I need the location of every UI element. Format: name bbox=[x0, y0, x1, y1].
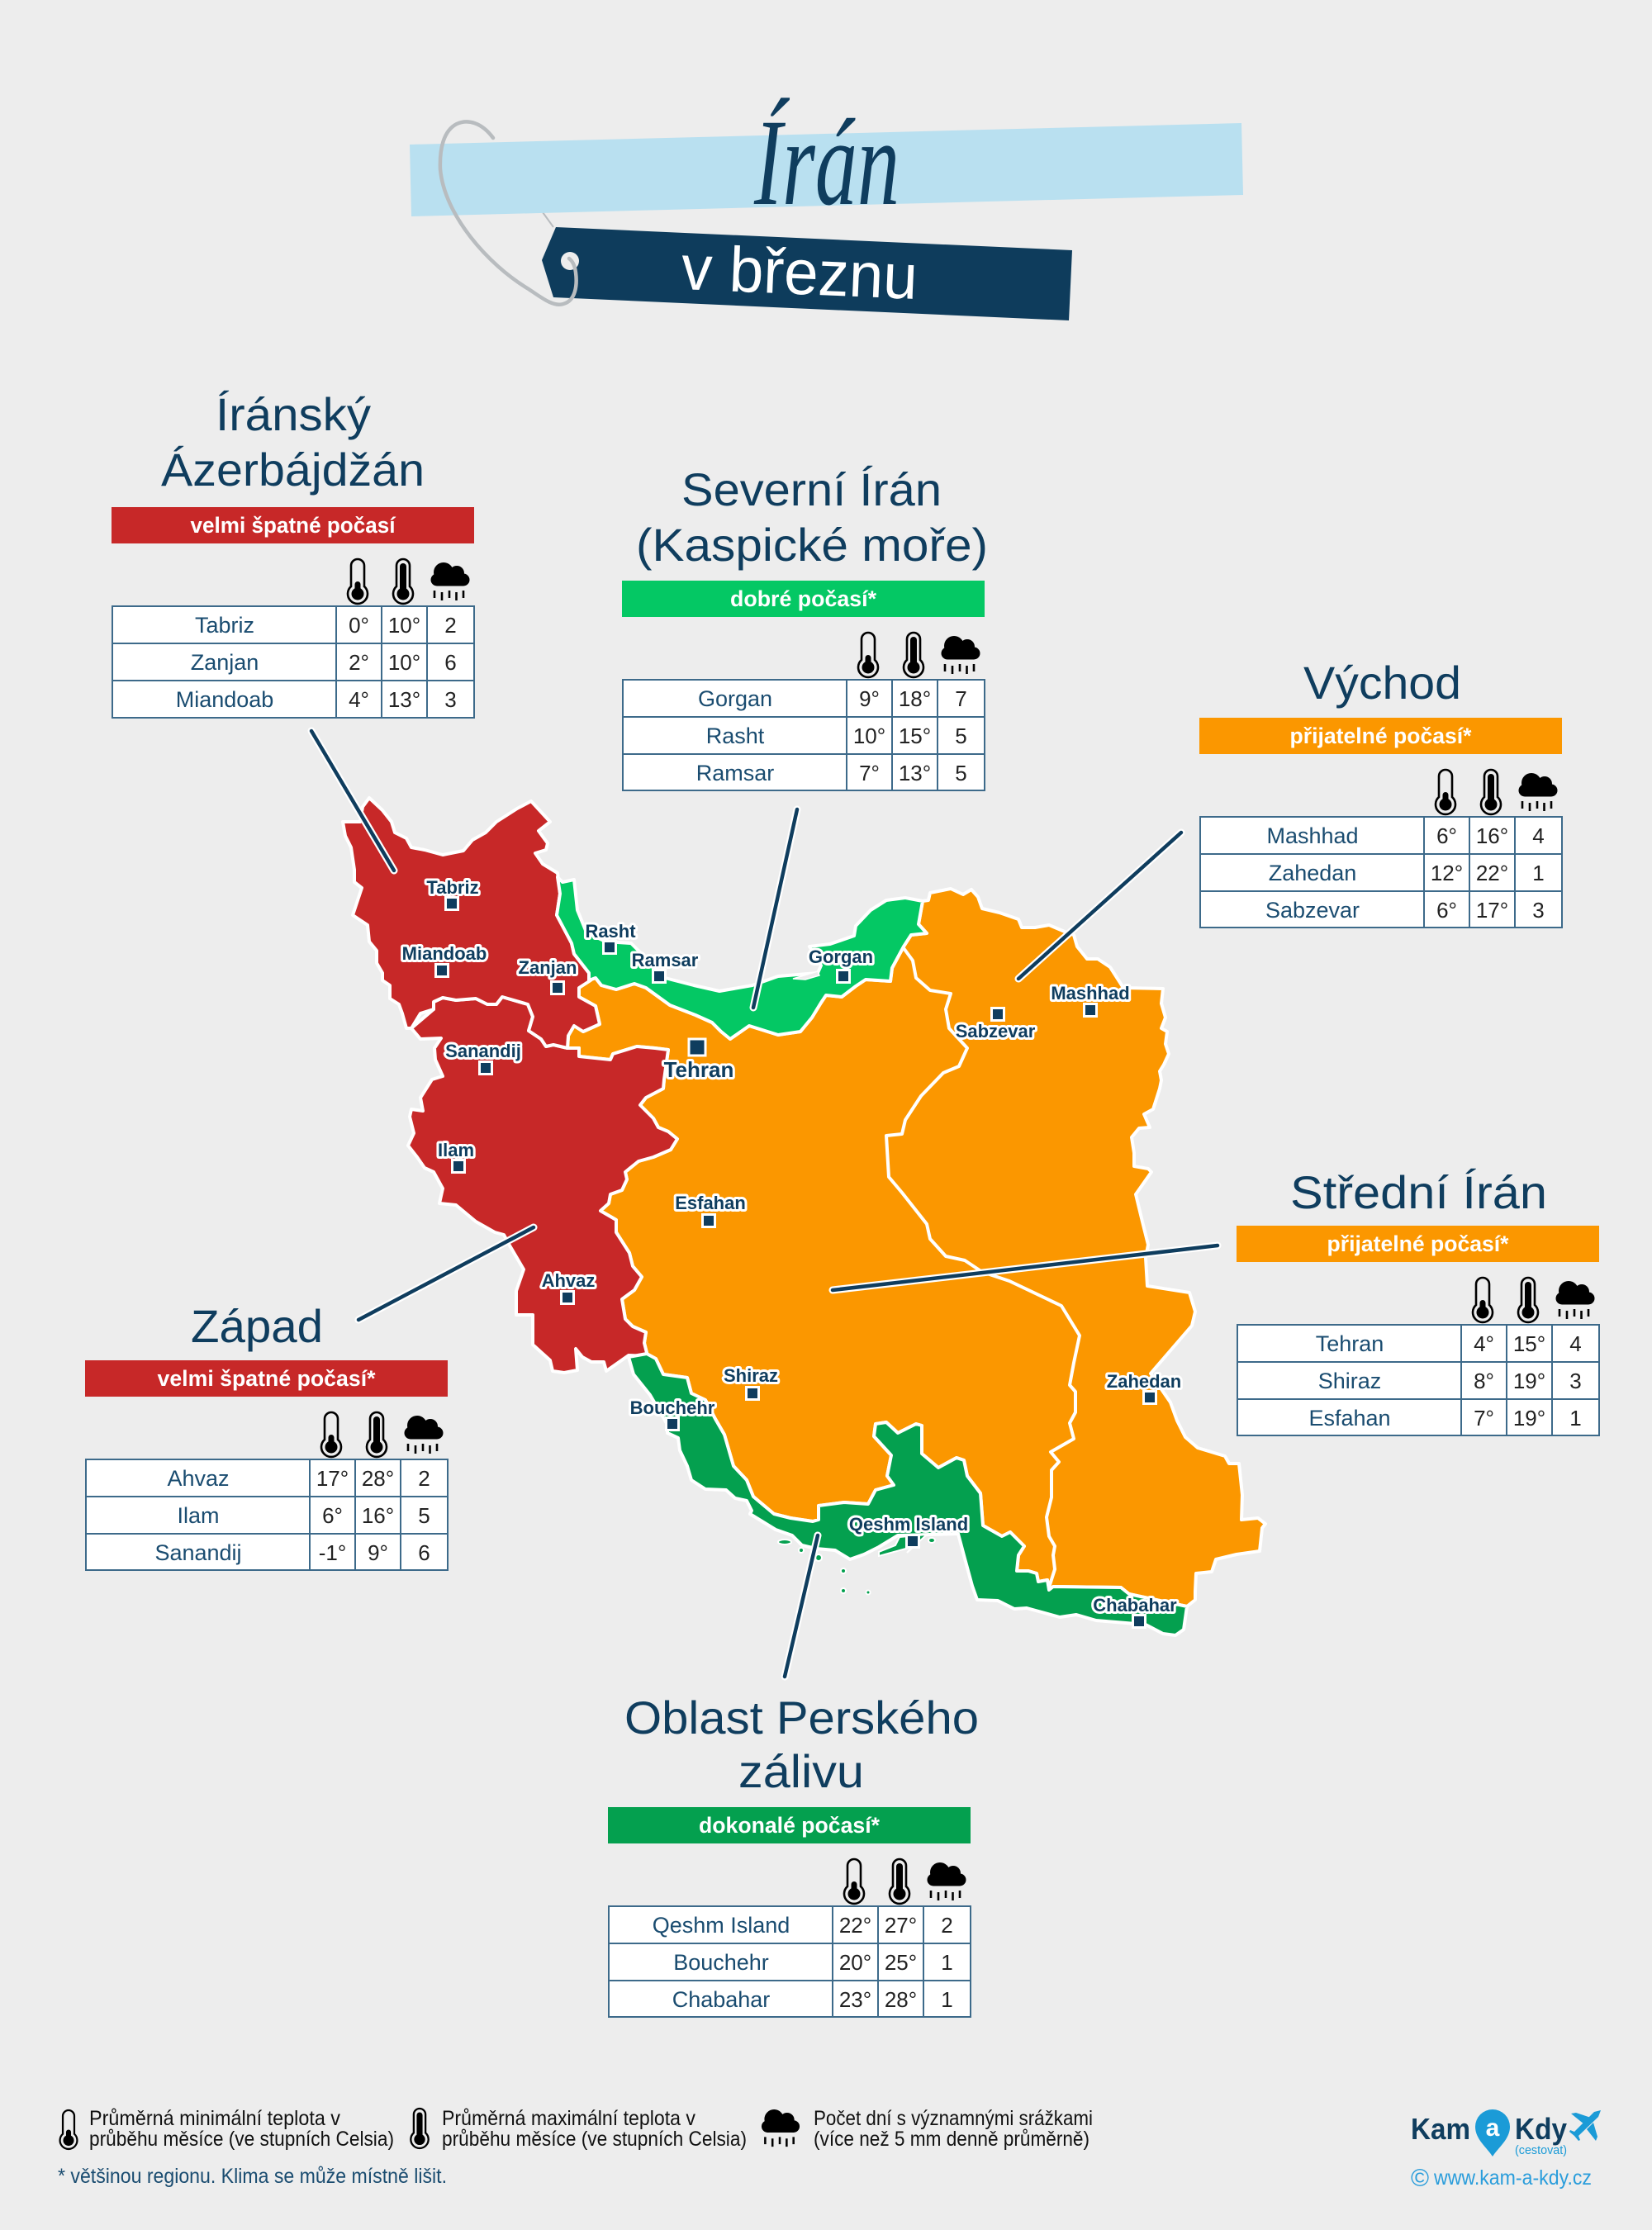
city: Tehran bbox=[664, 1039, 733, 1082]
weather table: Qeshm Island bbox=[653, 1913, 790, 1938]
weather table: 1 bbox=[941, 1950, 953, 1975]
weather table: 10° bbox=[388, 650, 420, 675]
weather table: Ilam bbox=[177, 1503, 220, 1528]
city: Qeshm Island bbox=[849, 1514, 968, 1548]
legend: maximum temperature bbox=[411, 2107, 747, 2151]
panel: east bbox=[1199, 657, 1562, 928]
city: Gorgan: Gorgan bbox=[809, 947, 873, 967]
tag ring bbox=[440, 121, 577, 305]
line: east bbox=[1018, 833, 1181, 979]
logo wordmark: Kdy: Kdy bbox=[1515, 2112, 1567, 2146]
city: Ilam bbox=[438, 1140, 474, 1173]
panel: central Iran bbox=[1237, 1166, 1599, 1435]
weather table: 4 bbox=[1532, 823, 1545, 848]
weather table: Gorgan bbox=[698, 686, 772, 711]
weather table: Rasht bbox=[706, 724, 765, 748]
city: Zahedan bbox=[1107, 1371, 1181, 1404]
weather table bbox=[85, 1360, 448, 1570]
weather table: 13° bbox=[899, 761, 931, 785]
logo pin bbox=[1475, 2109, 1510, 2156]
weather table: 2° bbox=[349, 650, 369, 675]
weather table: 7° bbox=[1474, 1406, 1494, 1431]
legend: rain days: Počet dní s významnými srážkami bbox=[814, 2107, 1093, 2130]
footnote: * většinou regionu. Klima se může místně lišit. bbox=[58, 2165, 447, 2188]
weather table: 9° bbox=[859, 686, 880, 711]
weather table: Tehran bbox=[1316, 1331, 1384, 1356]
weather table: 8° bbox=[1474, 1369, 1494, 1393]
weather table: dobré počasí* bbox=[730, 586, 876, 611]
weather table: velmi špatné počasí bbox=[190, 513, 396, 538]
city: Rasht: Rasht bbox=[585, 921, 636, 942]
weather table: 15° bbox=[899, 724, 931, 748]
weather table: 2 bbox=[941, 1913, 953, 1938]
weather table: 7° bbox=[859, 761, 880, 785]
website bbox=[1411, 2165, 1592, 2192]
panel: west bbox=[85, 1300, 448, 1570]
city: Ramsar bbox=[632, 950, 699, 983]
city: Esfahan: Esfahan bbox=[675, 1193, 746, 1213]
title band bbox=[410, 123, 1243, 216]
panel: Persian Gulf bbox=[608, 1691, 979, 2017]
weather table: 12° bbox=[1431, 861, 1463, 885]
weather table: 5 bbox=[418, 1503, 430, 1528]
heading bbox=[161, 388, 425, 496]
website: © bbox=[1411, 2165, 1429, 2192]
map of Iran bbox=[343, 798, 1265, 1635]
city: Sanandij bbox=[445, 1041, 521, 1074]
weather table: 23° bbox=[839, 1987, 871, 2012]
city: Bouchehr bbox=[630, 1397, 715, 1431]
heading bbox=[636, 463, 988, 571]
city: Tabriz bbox=[426, 877, 479, 910]
weather table: 17° bbox=[316, 1466, 349, 1491]
city: Tabriz: Tabriz bbox=[426, 877, 479, 898]
city: Ahvaz: Ahvaz bbox=[542, 1270, 595, 1291]
website: www.kam-a-kdy.cz bbox=[1433, 2166, 1592, 2190]
city: Sanandij: Sanandij bbox=[445, 1041, 521, 1061]
city: Bouchehr: Bouchehr bbox=[630, 1397, 715, 1418]
weather table: Tabriz bbox=[195, 613, 254, 638]
line: west bbox=[358, 1227, 534, 1320]
weather table: Ahvaz bbox=[167, 1466, 230, 1491]
region: Persian Gulf (dark green) bbox=[629, 1354, 1187, 1635]
city: Ahvaz bbox=[542, 1270, 595, 1303]
heading bbox=[624, 1691, 979, 1797]
logo tagline: (cestovat) bbox=[1515, 2143, 1567, 2157]
region: west (red) bbox=[408, 997, 677, 1373]
city: Tehran: Tehran bbox=[664, 1057, 733, 1082]
weather table: 13° bbox=[388, 687, 420, 712]
weather table: 7 bbox=[955, 686, 967, 711]
weather table: 6 bbox=[418, 1540, 430, 1565]
city: Ilam: Ilam bbox=[438, 1140, 474, 1160]
heading: zálivu bbox=[738, 1745, 864, 1797]
logo bbox=[1411, 2109, 1601, 2192]
weather table bbox=[622, 581, 985, 790]
weather table: přijatelné počasí* bbox=[1327, 1231, 1509, 1256]
weather table: 10° bbox=[388, 613, 420, 638]
weather table: 28° bbox=[885, 1987, 917, 2012]
weather table: Shiraz bbox=[1318, 1369, 1381, 1393]
legend: minimum temperature: Průměrná minimální teplota v bbox=[89, 2107, 340, 2130]
weather table: -1° bbox=[319, 1540, 346, 1565]
weather table: 22° bbox=[1476, 861, 1508, 885]
region: north, Caspian coast (bright green) bbox=[557, 877, 927, 1039]
city: Qeshm Island: Qeshm Island bbox=[849, 1514, 968, 1535]
legend: minimum temperature bbox=[60, 2107, 394, 2151]
weather table: 20° bbox=[839, 1950, 871, 1975]
weather table bbox=[112, 507, 474, 718]
legend: maximum temperature: Průměrná maximální teplota v bbox=[442, 2107, 695, 2130]
panel: northern Iran bbox=[622, 463, 988, 790]
weather table: 3 bbox=[1532, 898, 1545, 923]
line: central bbox=[833, 1245, 1218, 1290]
weather table: 22° bbox=[839, 1913, 871, 1938]
weather table: 3 bbox=[1569, 1369, 1582, 1393]
weather table: Sabzevar bbox=[1265, 898, 1360, 923]
lagoon inlet bbox=[793, 971, 819, 980]
weather table: 28° bbox=[362, 1466, 394, 1491]
weather table: Ramsar bbox=[696, 761, 774, 785]
weather table: 5 bbox=[955, 724, 967, 748]
callout lines bbox=[311, 731, 1218, 1677]
region: central and eastern Iran (orange) bbox=[567, 889, 1265, 1606]
weather table: 27° bbox=[885, 1913, 917, 1938]
region border: central / east bbox=[886, 948, 1080, 1587]
line: gulf bbox=[785, 1535, 818, 1677]
weather table: 1 bbox=[1569, 1406, 1582, 1431]
weather table: Chabahar bbox=[672, 1987, 770, 2012]
heading: Ázerbájdžán bbox=[161, 444, 425, 496]
city: Zanjan: Zanjan bbox=[519, 957, 577, 978]
city: Shiraz: Shiraz bbox=[724, 1365, 778, 1386]
Persian Gulf islands bbox=[778, 1535, 935, 1594]
line: Azerbaijan bbox=[311, 731, 394, 871]
heading: Oblast Perského bbox=[624, 1691, 979, 1744]
weather table: Zanjan bbox=[191, 650, 259, 675]
city: Mashhad: Mashhad bbox=[1051, 983, 1130, 1004]
weather table: 1 bbox=[941, 1987, 953, 2012]
title block bbox=[410, 94, 1243, 320]
weather table: Bouchehr bbox=[673, 1950, 769, 1975]
city: Ramsar: Ramsar bbox=[632, 950, 699, 970]
heading: Střední Írán bbox=[1290, 1166, 1547, 1218]
heading: Západ bbox=[191, 1300, 323, 1352]
city: Sabzevar: Sabzevar bbox=[956, 1021, 1036, 1041]
heading: Severní Írán bbox=[681, 463, 942, 515]
weather table bbox=[1237, 1226, 1599, 1435]
line: north bbox=[753, 809, 797, 1008]
legend: maximum temperature: průběhu měsíce (ve stupních Celsia) bbox=[442, 2128, 747, 2151]
panel: Iranian Azerbaijan bbox=[112, 388, 474, 718]
weather table: 2 bbox=[418, 1466, 430, 1491]
weather table: 16° bbox=[362, 1503, 394, 1528]
weather table: 6 bbox=[444, 650, 457, 675]
weather table: 4 bbox=[1569, 1331, 1582, 1356]
legend: rain days: (více než 5 mm denně průměrně) bbox=[814, 2128, 1089, 2151]
city: Miandoab: Miandoab bbox=[402, 943, 487, 964]
weather table: 17° bbox=[1476, 898, 1508, 923]
ring string bbox=[543, 212, 553, 227]
legend bbox=[58, 2107, 1093, 2188]
city: Sabzevar bbox=[956, 1008, 1036, 1041]
weather table: 10° bbox=[853, 724, 885, 748]
weather table: dokonalé počasí* bbox=[699, 1813, 880, 1838]
weather table: 4° bbox=[349, 687, 369, 712]
city: Zahedan: Zahedan bbox=[1107, 1371, 1181, 1392]
legend: rain days bbox=[762, 2107, 1093, 2151]
weather table: 6° bbox=[322, 1503, 343, 1528]
weather table: 18° bbox=[899, 686, 931, 711]
weather table: 25° bbox=[885, 1950, 917, 1975]
tag hole bbox=[561, 252, 579, 270]
city: Zanjan bbox=[519, 957, 577, 994]
region: Iranian Azerbaijan (red) bbox=[343, 798, 600, 1048]
heading: Východ bbox=[1303, 657, 1461, 709]
subtitle: v březnu: v březnu bbox=[680, 232, 919, 313]
weather table: 6° bbox=[1436, 898, 1457, 923]
weather table: 2 bbox=[444, 613, 457, 638]
weather table: 19° bbox=[1513, 1406, 1545, 1431]
weather table: přijatelné počasí* bbox=[1290, 724, 1472, 748]
subtitle tag bbox=[542, 227, 1072, 320]
weather table bbox=[1199, 718, 1562, 928]
icon: plane bbox=[1569, 2110, 1601, 2141]
weather table: 3 bbox=[444, 687, 457, 712]
weather table: Mashhad bbox=[1266, 823, 1359, 848]
logo wordmark: Kam: Kam bbox=[1411, 2112, 1470, 2146]
heading: (Kaspické moře) bbox=[636, 519, 988, 571]
weather table: Sanandij bbox=[154, 1540, 242, 1565]
weather table: Zahedan bbox=[1269, 861, 1356, 885]
city: Rasht bbox=[585, 921, 636, 953]
weather table: 16° bbox=[1476, 823, 1508, 848]
weather table: 0° bbox=[349, 613, 369, 638]
weather table: 19° bbox=[1513, 1369, 1545, 1393]
city: Miandoab bbox=[402, 943, 487, 976]
city: Chabahar: Chabahar bbox=[1093, 1595, 1177, 1616]
city: Gorgan bbox=[809, 947, 873, 983]
legend: minimum temperature: průběhu měsíce (ve stupních Celsia) bbox=[89, 2128, 394, 2151]
weather table: 9° bbox=[368, 1540, 388, 1565]
city markers and labels bbox=[402, 877, 1181, 1627]
title: Írán: Írán bbox=[753, 94, 900, 231]
city: Chabahar bbox=[1093, 1595, 1177, 1627]
heading: Íránský bbox=[216, 388, 371, 440]
weather table: Esfahan bbox=[1308, 1406, 1391, 1431]
weather table: 1 bbox=[1532, 861, 1545, 885]
city: Esfahan bbox=[675, 1193, 746, 1227]
logo pin: a bbox=[1486, 2114, 1500, 2142]
weather table: Miandoab bbox=[176, 687, 273, 712]
weather table: 6° bbox=[1436, 823, 1457, 848]
city: Shiraz bbox=[724, 1365, 778, 1399]
city: Mashhad bbox=[1051, 983, 1130, 1016]
weather table: 5 bbox=[955, 761, 967, 785]
weather table: velmi špatné počasí* bbox=[157, 1366, 376, 1391]
weather table: 15° bbox=[1513, 1331, 1545, 1356]
weather table: 4° bbox=[1474, 1331, 1494, 1356]
weather table bbox=[608, 1807, 971, 2017]
